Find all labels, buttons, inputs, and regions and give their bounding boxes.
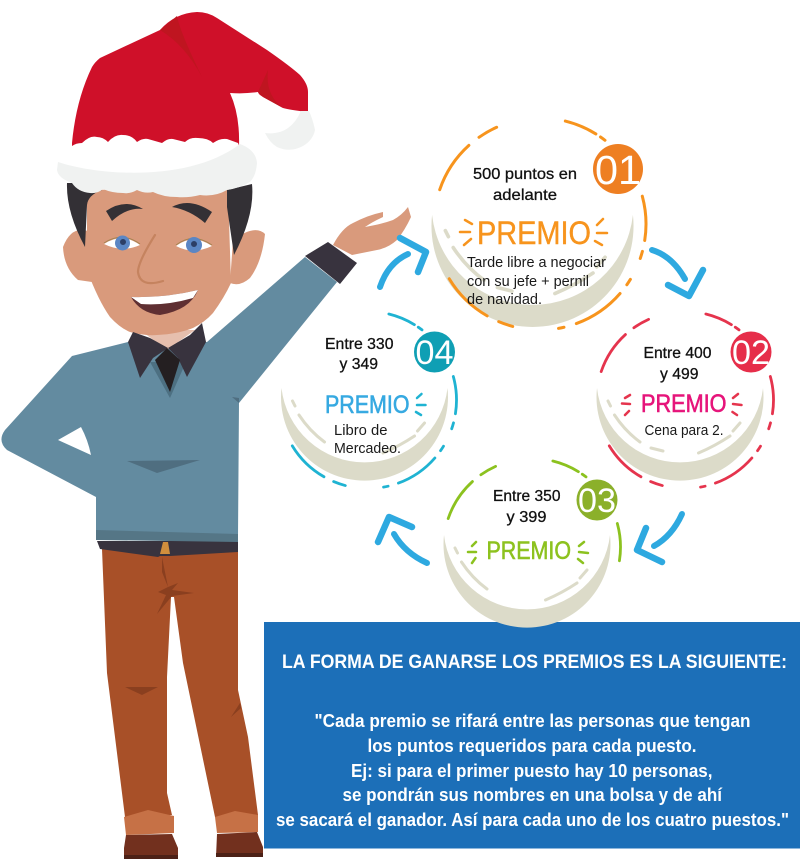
points 01: 500 puntos en [473, 166, 577, 183]
box body text: Ej: si para el primer puesto hay 10 personas, [351, 761, 712, 781]
arrow: 01 to 02 [652, 250, 703, 296]
crescent 03 [444, 535, 610, 628]
ears [63, 230, 265, 284]
premio heading 04: PREMIO [325, 391, 410, 419]
prize description 04: Mercadeo. [334, 440, 401, 457]
hat brim [60, 135, 245, 172]
premio heading 01: PREMIO [477, 215, 591, 251]
prize description 01: Tarde libre a negociar [467, 254, 606, 271]
shoe soles [124, 853, 263, 859]
trouser creases [125, 557, 241, 717]
box body text: los puntos requeridos para cada puesto. [368, 736, 696, 756]
teeth [131, 290, 198, 304]
tie [155, 348, 180, 392]
points 02 [644, 345, 712, 383]
neck [140, 330, 195, 350]
panel: prize 04 [260, 292, 476, 508]
badge 01: 01 [595, 147, 641, 193]
sweater chest crease [127, 460, 200, 473]
hair [67, 183, 252, 255]
collar [128, 323, 206, 378]
dashed ring 03 [424, 439, 640, 655]
panel: prize 03 [424, 439, 640, 655]
points 03 [493, 488, 561, 526]
points 03: Entre 350 [493, 488, 561, 505]
points 01: adelante [493, 187, 557, 204]
shirt shadow [150, 362, 186, 398]
eyebrows [106, 203, 212, 223]
hat brim shadow [57, 144, 257, 197]
arrow: 02 to 03 [637, 514, 682, 562]
arrow: 04 to 01 [380, 238, 426, 287]
points 04: y 349 [340, 356, 378, 373]
points 04 [325, 336, 394, 373]
santa hat red [72, 12, 308, 146]
pupils [120, 239, 197, 247]
trouser cuffs [124, 810, 258, 835]
hat pom-pom shadow [265, 111, 315, 150]
character: man in santa hat [1, 12, 411, 859]
arrow: 03 to 04 [378, 517, 427, 563]
eye whites [104, 238, 212, 250]
points 02: y 499 [660, 366, 699, 383]
dashed ring 04 [260, 292, 476, 508]
panel: prize 02 [577, 292, 793, 508]
points 04: Entre 330 [325, 336, 394, 353]
prize description 01 [467, 254, 606, 308]
crescent 02 [596, 388, 764, 481]
badge 04: 04 [416, 334, 454, 372]
premio heading 03: PREMIO [486, 537, 571, 565]
nose [138, 235, 163, 283]
hat folds [160, 16, 283, 108]
mouth [131, 290, 198, 315]
dashed ring 02 [577, 292, 793, 508]
face [87, 188, 231, 335]
panel: prize explanation box [264, 622, 800, 848]
shoes [124, 832, 263, 859]
dashed ring 01 [410, 94, 670, 354]
prize description 02: Cena para 2. [644, 422, 724, 439]
belt [97, 541, 238, 557]
points 02: Entre 400 [644, 345, 712, 362]
eyelids [104, 237, 212, 245]
badge 02: 02 [732, 334, 770, 372]
prize description 04: Libro de [334, 422, 388, 439]
box body text [276, 711, 789, 830]
panel: prize 01 [410, 94, 670, 354]
prize description 04 [334, 422, 401, 457]
sweater hem [96, 530, 238, 542]
belt buckle [160, 542, 170, 554]
crescent 01 [431, 215, 634, 327]
hand [333, 207, 411, 255]
badge 03: 03 [578, 482, 616, 520]
points 01 [473, 166, 577, 204]
sleeve cuff [305, 242, 357, 284]
prize description 01: de navidad. [467, 291, 542, 308]
points 03: y 399 [506, 509, 547, 526]
armpit crease [232, 397, 239, 403]
box body text: se pondrán sus nombres en una bolsa y de ahí [342, 785, 723, 805]
trousers [102, 549, 258, 817]
premio heading 02: PREMIO [641, 390, 726, 418]
prize description 01: con su jefe + pernil [467, 273, 589, 290]
box body text: "Cada premio se rifará entre las personas que tengan [314, 711, 750, 731]
crescent 04 [281, 388, 448, 481]
sweater [1, 257, 337, 536]
irises [115, 236, 202, 253]
